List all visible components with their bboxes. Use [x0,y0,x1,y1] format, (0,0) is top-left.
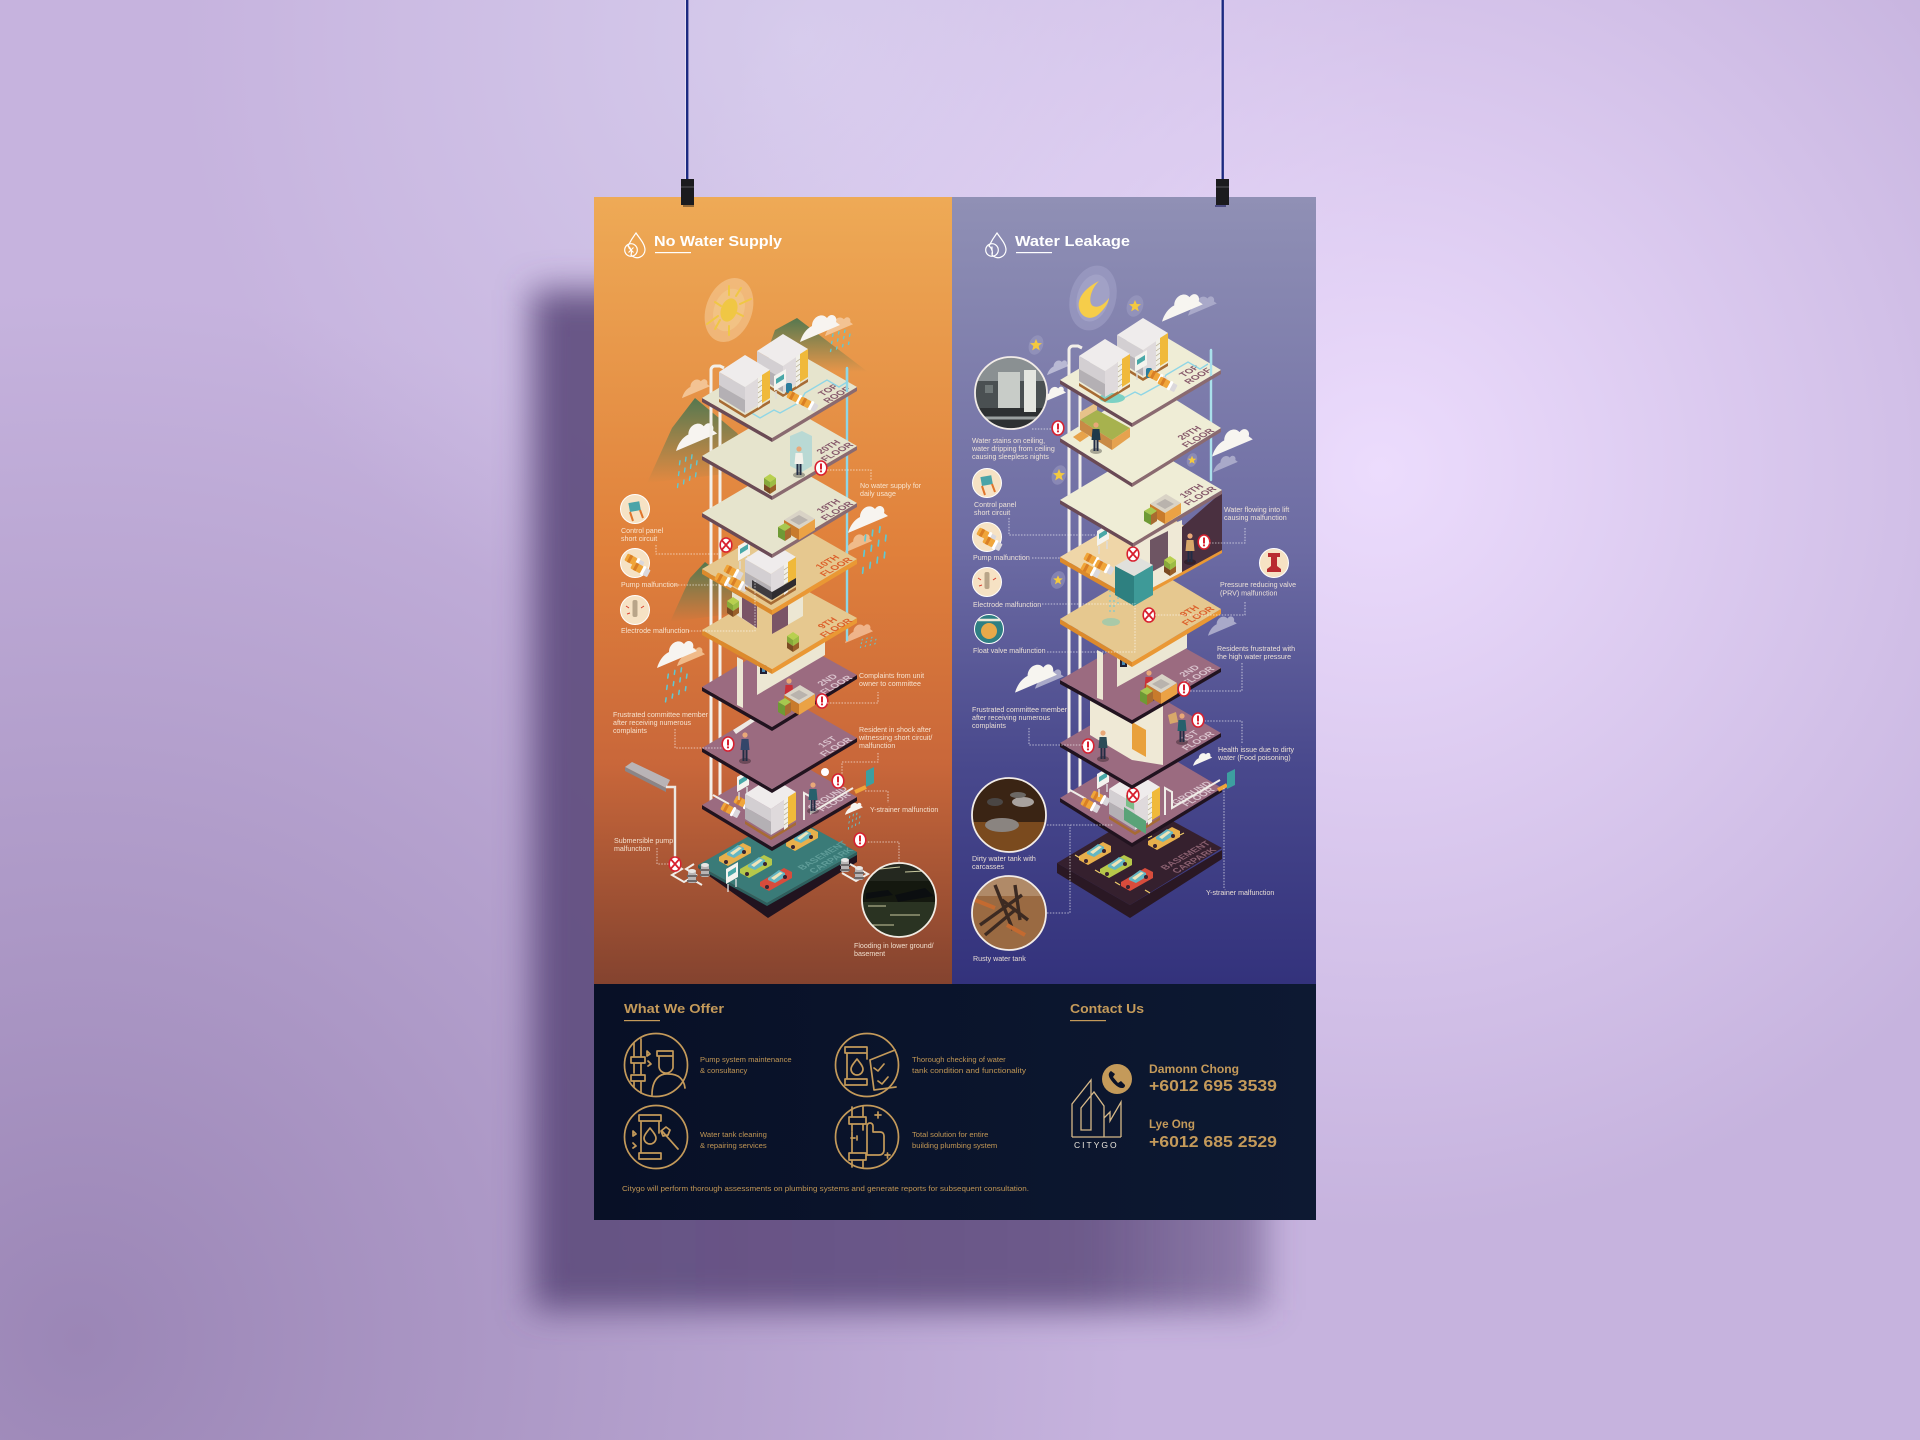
floor: 9th: 9TH [1178,604,1203,618]
text: dirty tank: carcasses [972,863,1004,871]
plumbing pipes [1069,350,1211,856]
text: flooding: basement [854,950,885,958]
text: resident: witnessing short circuit/ [858,734,932,742]
floor: roof: ROOF [821,386,854,405]
street lamp and drainage [625,762,675,857]
text: resident: malfunction [859,742,895,750]
floor: basement carpark [672,814,868,918]
text: lift: Water flowing into lift [1224,506,1289,514]
floor: 10th [1060,492,1222,606]
heading: contact us: Contact Us [1070,1001,1144,1016]
hanging cord: left [685,0,688,180]
text: float valve: Float valve malfunction [973,647,1046,655]
floor: 19th [702,463,857,558]
floor: 19th: FLOOR [819,500,857,522]
floor: ground: FLOOR [816,791,854,813]
text: residents: the high water pressure [1217,653,1291,661]
text: complaints: Complaints from unit [859,672,924,680]
floor: 9th: 9TH [816,616,841,630]
text: no water: No water supply for [860,482,921,490]
text: water stains: Water stains on ceiling, [972,437,1045,445]
text: tank cleaning: Water tank cleaning [700,1130,767,1139]
contact: damonn chong: +6012 695 3539 [1149,1078,1277,1095]
floor: 10th [702,519,857,615]
text: frustrated: Frustrated committee member [972,706,1067,714]
text: electrode: Electrode malfunction [621,627,689,635]
floor: 1st: 1ST [816,735,840,749]
icon: pump [620,548,651,578]
floor: ground: GROUND [805,785,851,812]
floor: 19th: 19TH [1177,483,1207,500]
heading: no water supply [625,233,783,258]
floor: 2nd [702,636,857,731]
text: PRV: Pressure reducing valve [1220,581,1296,589]
floor: 1st [1060,691,1221,789]
text: frustrated: after receiving numerous [972,714,1051,722]
text: residents: Residents frustrated with [1217,645,1295,653]
panel: no water supply [594,197,952,984]
text: frustrated: after receiving numerous [613,719,692,727]
photo: water stains [975,357,1047,430]
text: submersible: Submersible pump [614,837,673,845]
icon: electrode [972,568,1002,596]
icon: pump maintenance [624,1034,688,1096]
logo: citygo [1072,1080,1121,1150]
floor: basement carpark: BASEMENT [795,840,851,872]
callouts: no water supply [613,470,938,958]
text: water stains: water dripping from ceiling [971,445,1055,453]
heading: what we offer [624,1001,724,1021]
text: pump maintenance: Pump system maintenance [700,1055,792,1064]
floor: 20th: 20TH [1175,425,1205,442]
icon: tank cleaning [624,1106,688,1168]
clip: left [681,179,694,207]
callouts: water leakage [971,357,1296,963]
text: complaints: owner to committee [859,680,921,688]
floor: roof: ROOF [1182,367,1215,386]
text: flooding: Flooding in lower ground/ [854,942,934,950]
floor: basement carpark: BASEMENT [1158,840,1214,872]
floor: basement carpark: CARPARK [1170,846,1220,875]
floor: 19th: FLOOR [1182,485,1220,507]
floor: 10th: 10TH [813,554,843,571]
clouds and rain [657,315,888,829]
hanging cord: right [1220,0,1224,180]
plumbing pipes [711,368,847,858]
photo: dirty tank [972,778,1046,852]
floor: basement carpark [1057,808,1223,918]
floor: ground [702,756,874,851]
floor: 2nd [1060,628,1221,724]
floor: 1st [702,698,857,793]
floor: 1st: FLOOR [1180,730,1218,752]
text: y-strainer: Y-strainer malfunction [1206,889,1274,897]
text: control panel: Control panel [621,527,663,535]
floor: 9th: FLOOR [818,617,856,639]
heading: contact us [1070,1001,1144,1021]
alert: submersible pump [669,857,681,871]
text: control panel: short circuit [621,535,657,543]
text: no water: daily usage [860,490,896,498]
floor: roof: TOP [1177,364,1203,379]
floor: ground [1060,745,1235,847]
floor: 1st: FLOOR [818,736,856,758]
floor: 9th: FLOOR [1180,605,1218,627]
icon: total solution [836,1106,898,1168]
text: pump: Pump malfunction [621,581,678,589]
text: dirty tank: Dirty water tank with [972,855,1036,863]
logo: citygo: CITYGO [1074,1140,1119,1150]
text: frustrated: complaints [972,722,1006,730]
clouds [1015,294,1253,766]
text: control panel: Control panel [974,501,1016,509]
text: pump: Pump malfunction [973,554,1030,562]
floor: 2nd: 2ND [815,673,841,688]
contact: lye ong: Lye Ong [1149,1119,1195,1131]
floor: 2nd: 2ND [1177,664,1203,679]
panel: footer [594,984,1316,1220]
mountains [647,318,868,622]
icon: PRV [1260,548,1288,578]
floor: 20th [1052,383,1221,487]
poster shadow [532,290,1267,1310]
text: lift: causing malfunction [1224,514,1287,522]
floor: roof [702,334,857,442]
text: submersible: malfunction [614,845,650,853]
contact: lye ong: +6012 685 2529 [1149,1134,1277,1151]
contact: lye ong [1149,1119,1277,1151]
icon: tank checking [836,1034,898,1096]
floor: 10th: FLOOR [818,556,856,578]
floor: ground: FLOOR [1180,786,1218,808]
floor: 9th [702,580,857,674]
text: tank checking: Thorough checking of water [912,1055,1006,1064]
photo: rusty tank [972,876,1046,950]
icon: float valve [974,614,1004,644]
text: PRV: (PRV) malfunction [1220,590,1277,598]
heading: water leakage [986,233,1130,258]
icon: control panel [620,494,650,524]
icon: sun [696,271,762,349]
text: health: Health issue due to dirty [1218,746,1294,754]
floor: 19th: 19TH [814,498,844,515]
icon: control panel [972,468,1002,498]
alert: flooding [854,833,866,847]
photo: flooded basement [862,863,936,937]
icon: pump [972,522,1003,552]
text: resident: Resident in shock after [859,726,931,734]
floor: 2nd: FLOOR [818,674,856,696]
text: total solution: Total solution for entire [912,1130,988,1139]
floor: 20th: FLOOR [1180,427,1218,449]
text: total solution: building plumbing system [912,1141,997,1150]
heading: water leakage: Water Leakage [1015,233,1130,250]
text: pump maintenance: & consultancy [700,1066,747,1075]
floor: ground: GROUND [1169,780,1215,807]
floor: basement carpark: CARPARK [807,846,857,875]
text: footnote: Citygo will perform thorough assessments on plumbing systems and generate reports for subsequent consultation. [622,1184,1029,1193]
floor: 20th [702,406,857,500]
heading: what we offer: What We Offer [624,1001,724,1016]
floor: roof: TOP [816,383,842,398]
text: frustrated: complaints [613,727,647,735]
text: y-strainer: Y-strainer malfunction [870,806,938,814]
text: water stains: causing sleepless nights [972,453,1049,461]
icon: electrode [620,596,650,624]
poster [594,197,1316,1220]
text: tank checking: tank condition and functionality [912,1066,1026,1075]
floor: 19th [1060,447,1222,547]
floor: roof [1060,318,1221,427]
floor: 9th [1060,566,1221,667]
text: rusty tank: Rusty water tank [973,955,1026,963]
heading: no water supply: No Water Supply [654,233,783,250]
text: control panel: short circuit [974,509,1010,517]
floor: 20th: FLOOR [819,441,857,463]
icon: phone [1102,1064,1132,1094]
text: electrode: Electrode malfunction [973,601,1041,609]
panel: water leakage [952,197,1316,984]
text: tank cleaning: & repairing services [700,1141,767,1150]
floor: 20th: 20TH [814,439,844,456]
contact: damonn chong [1149,1064,1277,1095]
icon: moon [1062,260,1124,336]
clip: right [1215,179,1229,207]
floor: 2nd: FLOOR [1180,665,1218,687]
stars [1026,293,1199,591]
text: health: water (Food poisoning) [1217,754,1291,762]
contact: damonn chong: Damonn Chong [1149,1064,1239,1076]
text: frustrated: Frustrated committee member [613,711,708,719]
floor: 1st: 1ST [1178,729,1202,743]
